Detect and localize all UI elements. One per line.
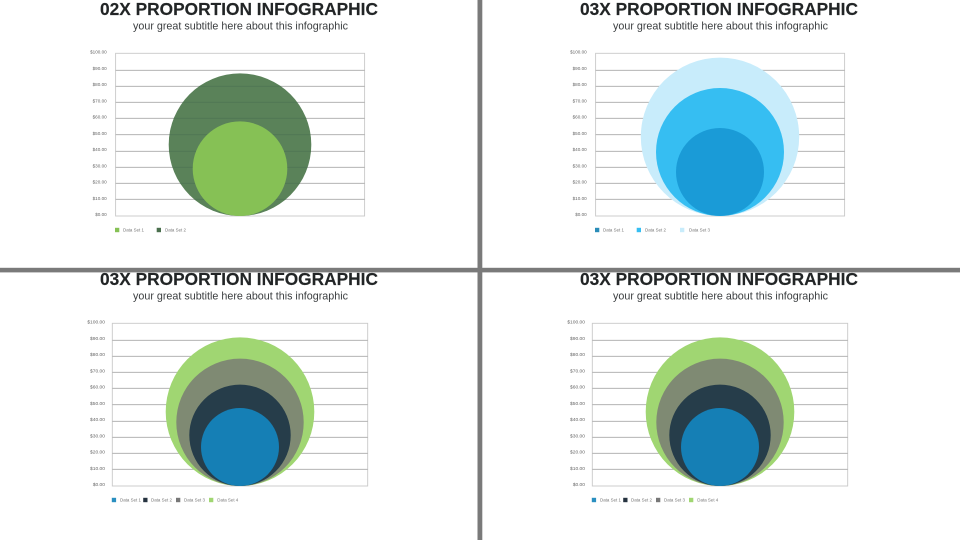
subtitle: your great subtitle here about this infographic [613,21,829,33]
legend: Data Set 3 [689,228,710,233]
y axis labels: $60.00 [90,385,105,391]
y axis labels: $10.00 [573,196,587,201]
legend: Data Set 3 [664,498,685,503]
y axis labels: $10.00 [570,466,585,472]
y axis labels: $100.00 [567,320,585,326]
y axis labels: $0.00 [93,482,105,488]
y axis labels: $50.00 [573,131,587,136]
divider: horizontal bar [0,268,960,272]
y axis labels: $80.00 [573,82,587,87]
y axis labels: $70.00 [93,98,107,103]
y axis labels: $80.00 [570,352,585,358]
y axis labels: $80.00 [93,82,107,87]
y axis labels [567,320,585,488]
y axis labels: $60.00 [570,385,585,391]
y axis labels: $50.00 [570,401,585,407]
y axis labels: $20.00 [93,180,107,185]
y axis labels: $90.00 [93,66,107,71]
panel: 03X proportion infographic, blue [570,0,858,233]
y axis labels: $90.00 [90,336,105,342]
y axis labels: $90.00 [573,66,587,71]
subtitle: your great subtitle here about this infographic [613,291,829,303]
y axis labels: $30.00 [570,433,585,439]
legend [115,228,186,233]
y axis labels: $50.00 [90,401,105,407]
legend [112,498,239,503]
y axis labels: $70.00 [570,368,585,374]
y axis labels [90,50,107,217]
panel: 03X proportion infographic, four sets left [87,269,378,503]
y axis labels: $70.00 [573,98,587,103]
y axis labels: $0.00 [573,482,585,488]
subtitle: your great subtitle here about this infographic [133,21,349,33]
y axis labels: $60.00 [93,115,107,120]
divider: vertical bar [478,0,482,540]
legend [595,228,710,233]
y axis labels: $100.00 [570,50,587,55]
title: 03X PROPORTION INFOGRAPHIC [100,269,378,289]
legend: Data Set 1 [603,228,624,233]
legend: Data Set 4 [697,498,719,503]
title: 03X PROPORTION INFOGRAPHIC [580,269,858,289]
y axis labels: $20.00 [573,180,587,185]
legend: Data Set 4 [217,498,239,503]
panel: 03X proportion infographic, four sets right [567,269,858,503]
y axis labels: $0.00 [575,212,587,217]
y axis labels: $20.00 [570,450,585,456]
legend: Data Set 2 [631,498,652,503]
y axis labels: $10.00 [90,466,105,472]
y axis labels: $80.00 [90,352,105,358]
y axis labels: $10.00 [93,196,107,201]
legend: Data Set 2 [645,228,666,233]
legend [592,498,719,503]
y axis labels: $30.00 [90,433,105,439]
legend: Data Set 2 [165,228,186,233]
y axis labels: $100.00 [90,50,107,55]
chart: nested circles [596,53,845,216]
legend: Data Set 1 [600,498,621,503]
y axis labels: $20.00 [90,450,105,456]
legend: Data Set 1 [120,498,141,503]
y axis labels: $40.00 [93,147,107,152]
y axis labels: $0.00 [95,212,107,217]
y axis labels: $60.00 [573,115,587,120]
legend: Data Set 2 [151,498,172,503]
y axis labels: $40.00 [573,147,587,152]
legend: Data Set 3 [184,498,205,503]
y axis labels: $100.00 [87,320,105,326]
y axis labels [570,50,587,217]
chart: nested circles [592,323,848,486]
y axis labels: $40.00 [90,417,105,423]
y axis labels: $30.00 [573,163,587,168]
panel: 02X proportion infographic [90,0,378,233]
legend: Data Set 1 [123,228,144,233]
subtitle: your great subtitle here about this infographic [133,291,349,303]
y axis labels: $90.00 [570,336,585,342]
y axis labels: $50.00 [93,131,107,136]
y axis labels: $70.00 [90,368,105,374]
y axis labels: $30.00 [93,163,107,168]
chart: nested circles [116,53,365,216]
y axis labels [87,320,105,488]
chart: nested circles [112,323,368,486]
y axis labels: $40.00 [570,417,585,423]
